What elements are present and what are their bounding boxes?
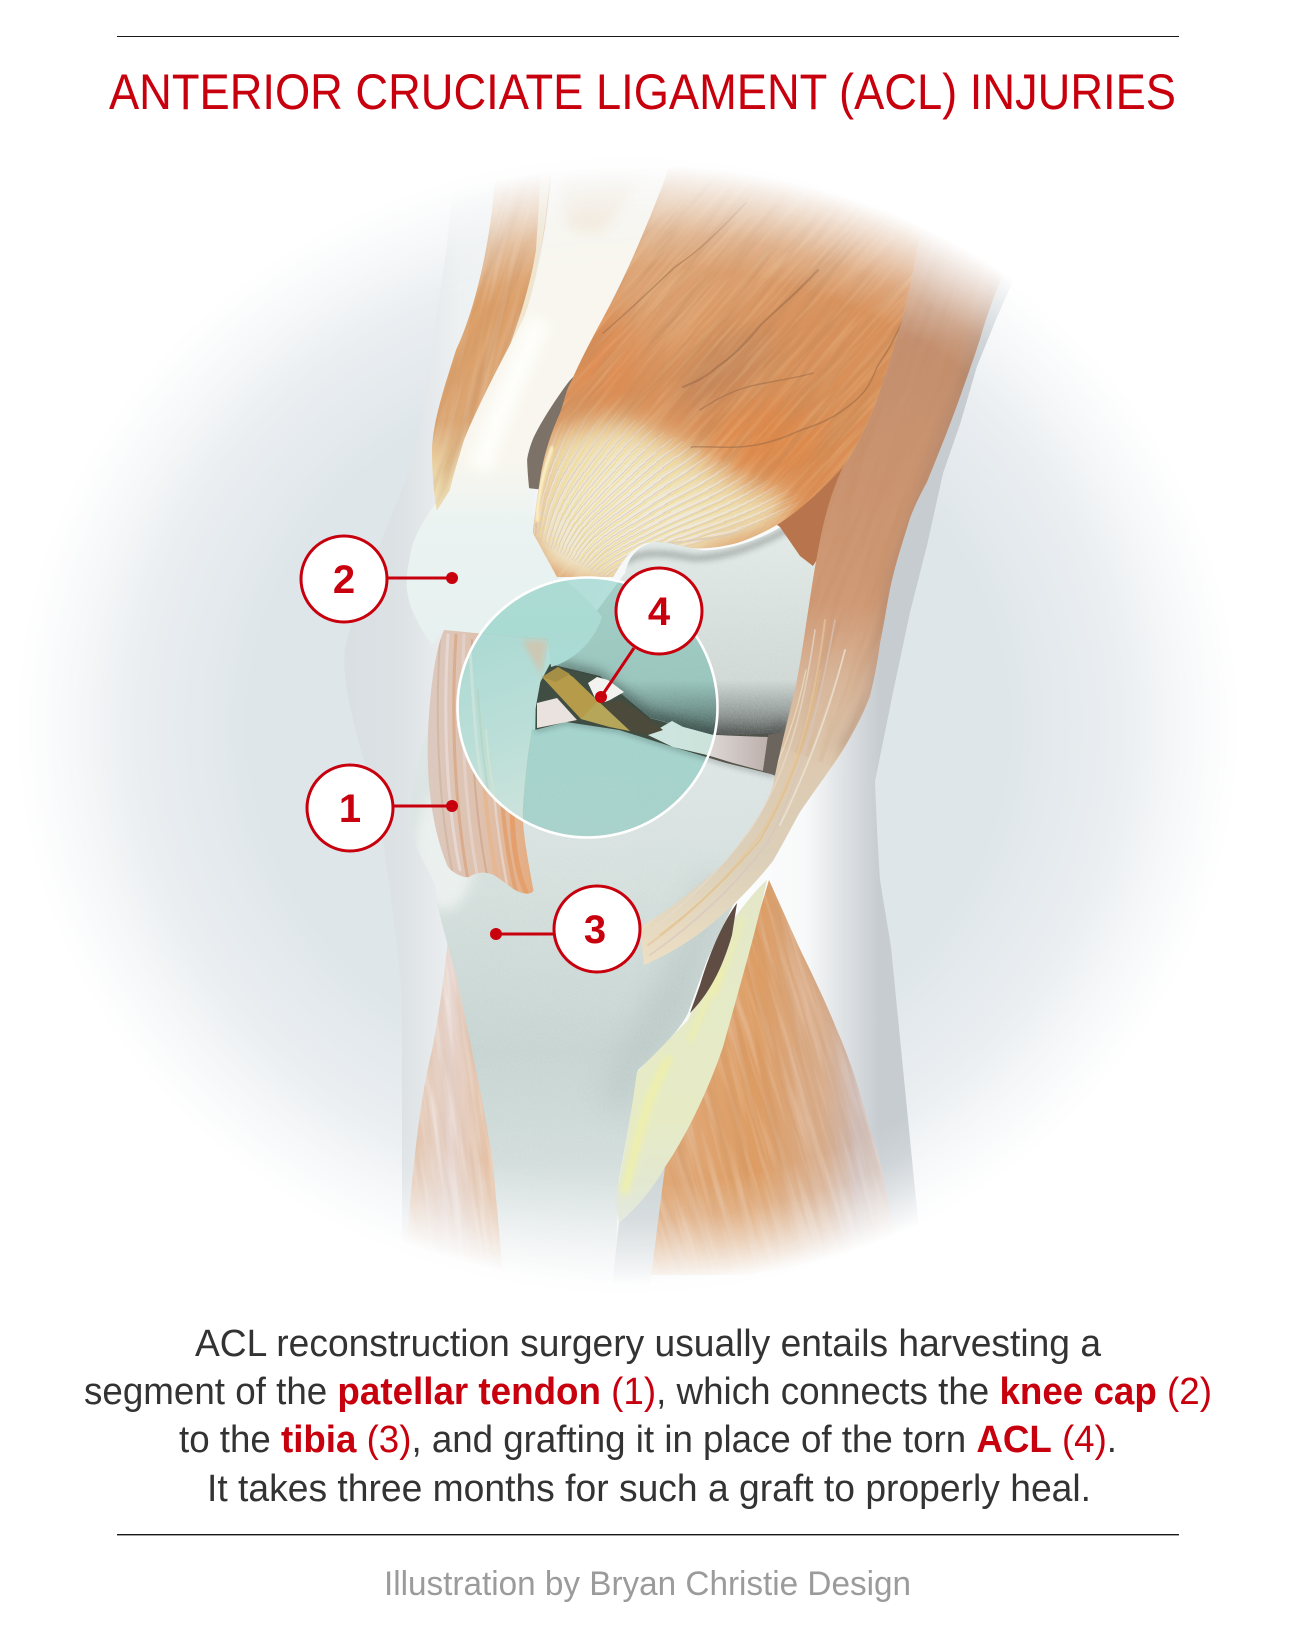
femur (556, 526, 830, 737)
yellow fascia strip (616, 880, 767, 1223)
femur lower shadow (556, 667, 787, 737)
line 2: segment of the patellar tendon (1), which connects the knee cap (2) (84, 1371, 1212, 1413)
teal lens tint (482, 578, 716, 836)
callout 1: patellar tendon: 1 (339, 787, 361, 831)
shadow cast by thigh muscle (626, 528, 790, 562)
title: ANTERIOR CRUCIATE LIGAMENT (ACL) INJURIES (109, 64, 1176, 120)
line 1: ACL reconstruction surgery usually entails harvesting a (195, 1323, 1102, 1365)
harvested tendon ghost (428, 630, 548, 894)
meniscus top (588, 677, 624, 702)
callout 4: ACL (595, 568, 702, 703)
yellow highlights (625, 920, 742, 1190)
patella (407, 500, 602, 667)
leg silhouette (402, 248, 991, 1223)
cream tendon base (530, 420, 790, 590)
body text (84, 1323, 1212, 1510)
lateral thigh muscle (533, 172, 920, 577)
pale meniscus inside lens (648, 721, 714, 755)
left lower-leg muscle (408, 945, 502, 1261)
dark band beneath graft (600, 700, 663, 735)
dark wedge beside meniscus (763, 731, 786, 776)
dark slot (690, 903, 737, 1013)
callout 3: tibia: 3 (584, 908, 606, 952)
left edge highlight (537, 448, 552, 520)
tibia (411, 715, 775, 1275)
brown muscle wedge (777, 465, 844, 566)
callout 4: ACL: 4 (648, 590, 671, 634)
callout 1: patellar tendon (307, 765, 458, 851)
bottom rule (117, 1534, 1179, 1535)
callout 2: knee cap (301, 536, 458, 622)
left thigh muscle (432, 180, 550, 511)
lens outline (458, 578, 718, 838)
tendon fibres (534, 410, 800, 577)
right calf muscle (652, 880, 888, 1275)
grey shaft below fascia (615, 1167, 665, 1275)
quadriceps tendon (436, 186, 646, 512)
meniscus right (648, 721, 768, 771)
muscle creases (603, 203, 906, 447)
tibia shading (415, 722, 775, 1113)
lateral band muscle (641, 236, 1000, 965)
patellar tendon (428, 630, 548, 894)
dark joint space (535, 664, 785, 782)
silhouette shadow band (951, 332, 991, 450)
line 3: to the tibia (3), and grafting it in place of the torn ACL (4). (179, 1419, 1117, 1461)
illustration: knee anatomy (402, 171, 1008, 1275)
bone grain (473, 534, 794, 1110)
callout 2: knee cap: 2 (333, 558, 355, 602)
meniscus left (537, 698, 577, 728)
dark gap beside tendon (527, 375, 575, 490)
background halo (16, 155, 1240, 1295)
top rule (117, 36, 1179, 37)
ACL graft (542, 667, 630, 731)
line 4: It takes three months for such a graft to properly heal. (207, 1468, 1091, 1510)
cream fascia strip (510, 188, 548, 344)
callout 3: tibia (490, 886, 640, 972)
credit: Illustration by Bryan Christie Design (384, 1565, 911, 1603)
